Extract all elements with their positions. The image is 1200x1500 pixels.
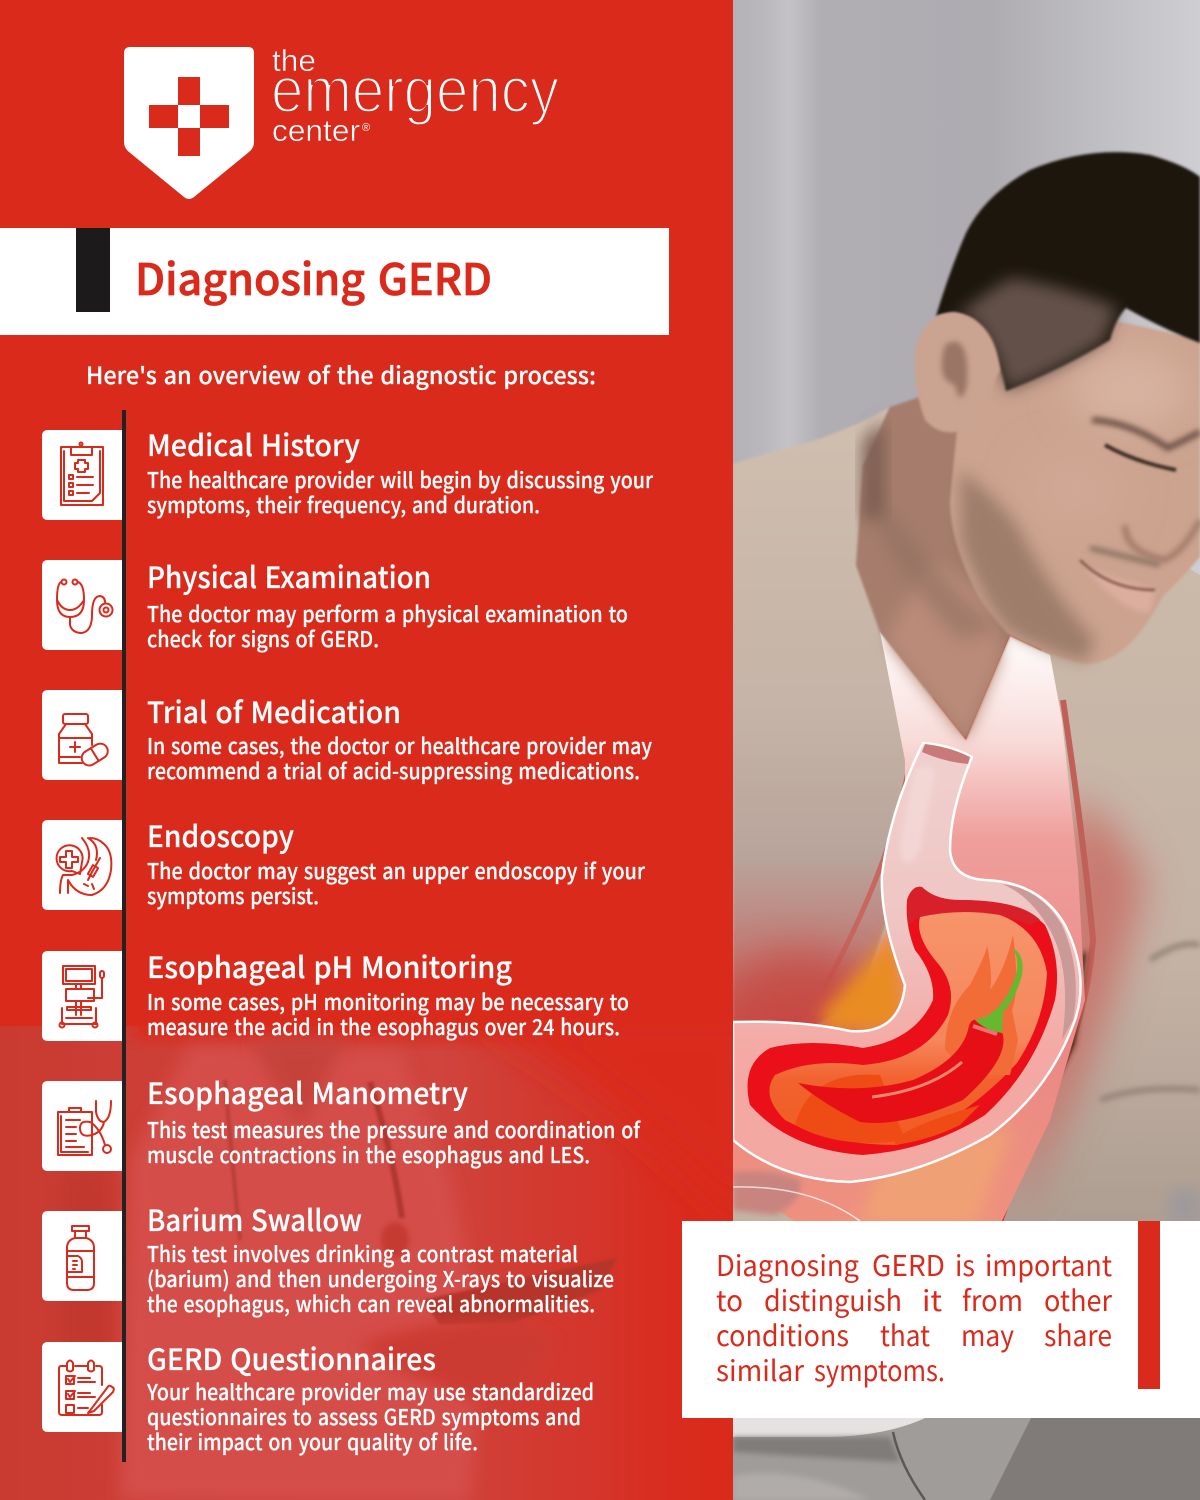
- icon: clipboard: [42, 430, 122, 520]
- esophageal pH monitoring text: measure the acid in the esophagus over 24 hours.: [147, 1011, 620, 1042]
- ear: [914, 312, 1000, 432]
- neck: [856, 390, 1010, 740]
- trial of medication text: [147, 690, 652, 786]
- barium swallow text: (barium) and then undergoing X-rays to visualize: [147, 1263, 614, 1294]
- esophageal pH monitoring text: [147, 945, 629, 1042]
- trial of medication text: Trial of Medication: [147, 690, 401, 732]
- callout text: important: [985, 1244, 1112, 1285]
- timeline bar: [122, 410, 126, 1462]
- GERD questionnaires text: questionnaires to assess GERD symptoms and: [147, 1401, 581, 1432]
- callout text: share: [1044, 1314, 1112, 1355]
- esophageal manometry text: muscle contractions in the esophagus and LES.: [147, 1139, 590, 1170]
- endoscopy text: symptoms persist.: [147, 880, 319, 911]
- logo wordmark: the: [272, 43, 316, 78]
- physical examination text: The doctor may perform a physical examination to: [147, 598, 628, 629]
- step: endoscopy: [42, 814, 645, 911]
- logo shield: [124, 47, 254, 199]
- endoscopy text: The doctor may suggest an upper endoscopy if your: [147, 855, 645, 886]
- esophageal pH monitoring text: Esophageal pH Monitoring: [147, 945, 512, 987]
- esophageal manometry text: This test measures the pressure and coordination of: [147, 1114, 641, 1145]
- callout text: is: [955, 1244, 975, 1285]
- barium swallow text: This test involves drinking a contrast material: [147, 1238, 578, 1269]
- barium swallow text: [147, 1198, 614, 1319]
- icon: endoscopy stomach: [42, 820, 122, 910]
- faded doctor photo: [0, 1026, 641, 1500]
- step: GERD questionnaires: [42, 1337, 594, 1457]
- step: medical history: [42, 423, 653, 520]
- physical examination text: check for signs of GERD.: [147, 623, 379, 654]
- step: esophageal manometry: [42, 1071, 641, 1171]
- GERD questionnaires text: their impact on your quality of life.: [147, 1426, 478, 1457]
- step: barium swallow: [42, 1198, 614, 1319]
- callout text: distinguish: [764, 1279, 902, 1320]
- medical history text: [147, 423, 653, 520]
- medical history text: Medical History: [147, 423, 360, 465]
- face: [950, 320, 1200, 664]
- esophageal pH monitoring text: In some cases, pH monitoring may be necessary to: [147, 986, 629, 1017]
- callout text: conditions: [716, 1314, 849, 1355]
- step: physical examination: [42, 555, 628, 654]
- callout text: symptoms.: [814, 1349, 945, 1390]
- logo wordmark: center: [272, 113, 360, 148]
- title: Diagnosing GERD: [135, 245, 492, 308]
- trousers: [733, 1410, 1200, 1500]
- GERD questionnaires text: [146, 1337, 594, 1457]
- physical examination text: [147, 555, 628, 654]
- wall: [733, 0, 1200, 620]
- callout text: it: [922, 1279, 942, 1320]
- hair: [936, 152, 1200, 391]
- esophageal manometry text: Esophageal Manometry: [147, 1071, 468, 1113]
- endoscopy text: [147, 814, 645, 911]
- physical examination text: Physical Examination: [147, 555, 431, 597]
- subheading: Here's an overview of the diagnostic process:: [86, 357, 596, 391]
- mouth: [1091, 574, 1154, 612]
- callout text: [716, 1244, 1113, 1390]
- callout text: GERD: [872, 1244, 945, 1285]
- stomach illustration: [733, 743, 1081, 1182]
- t-shirt: [733, 632, 1085, 1225]
- panel: red background: [0, 1026, 641, 1500]
- icon: monitoring machine: [42, 951, 122, 1041]
- trial of medication text: In some cases, the doctor or healthcare provider may: [147, 730, 652, 761]
- callout: [682, 1221, 1200, 1418]
- logo cross: [149, 77, 229, 156]
- logo wordmark: ®: [362, 122, 370, 134]
- chili pepper: [798, 1020, 1004, 1123]
- red lining: [748, 887, 1057, 1155]
- brow and eye: [1092, 420, 1200, 448]
- logo wordmark: emergency: [271, 54, 559, 126]
- hand: [733, 1171, 801, 1215]
- esophageal manometry text: [147, 1071, 641, 1170]
- callout text: from: [962, 1279, 1023, 1320]
- red glow: [733, 932, 874, 1030]
- title banner: [0, 228, 669, 335]
- nose: [1125, 520, 1200, 560]
- step: trial of medication: [42, 690, 652, 786]
- GERD questionnaires text: GERD Questionnaires: [147, 1337, 436, 1379]
- barium swallow text: Barium Swallow: [147, 1198, 362, 1240]
- stomach wall: [733, 743, 1081, 1182]
- photo: man with stomach pain: [720, 0, 1200, 1500]
- jacket: [733, 407, 1200, 1230]
- callout text: to: [716, 1279, 743, 1320]
- logo wordmark: [271, 43, 559, 148]
- endoscopy text: Endoscopy: [147, 814, 294, 856]
- callout text: similar: [716, 1349, 805, 1390]
- callout text: Diagnosing: [716, 1244, 859, 1285]
- callout text: other: [1044, 1279, 1113, 1320]
- step: esophageal pH monitoring: [42, 945, 629, 1042]
- icon: medicine bottle and pill: [42, 690, 122, 780]
- flames: [945, 935, 1018, 1075]
- callout text: that: [880, 1314, 930, 1355]
- icon: checklist with pencil: [42, 1342, 122, 1432]
- icon: barium bottle: [42, 1211, 122, 1301]
- medical history text: The healthcare provider will begin by discussing your: [147, 464, 653, 495]
- medical history text: symptoms, their frequency, and duration.: [147, 489, 540, 520]
- callout text: may: [961, 1314, 1014, 1355]
- GERD questionnaires text: Your healthcare provider may use standardized: [146, 1376, 594, 1407]
- icon: clipboard with stethoscope: [42, 1081, 122, 1171]
- chili stem: [975, 948, 1023, 1033]
- stomach contents: [769, 912, 1047, 1145]
- logo: [124, 43, 559, 199]
- trial of medication text: recommend a trial of acid-suppressing medications.: [147, 755, 640, 786]
- barium swallow text: the esophagus, which can reveal abnormalities.: [147, 1288, 595, 1319]
- stubble: [960, 470, 1095, 662]
- icon: stethoscope: [42, 560, 122, 650]
